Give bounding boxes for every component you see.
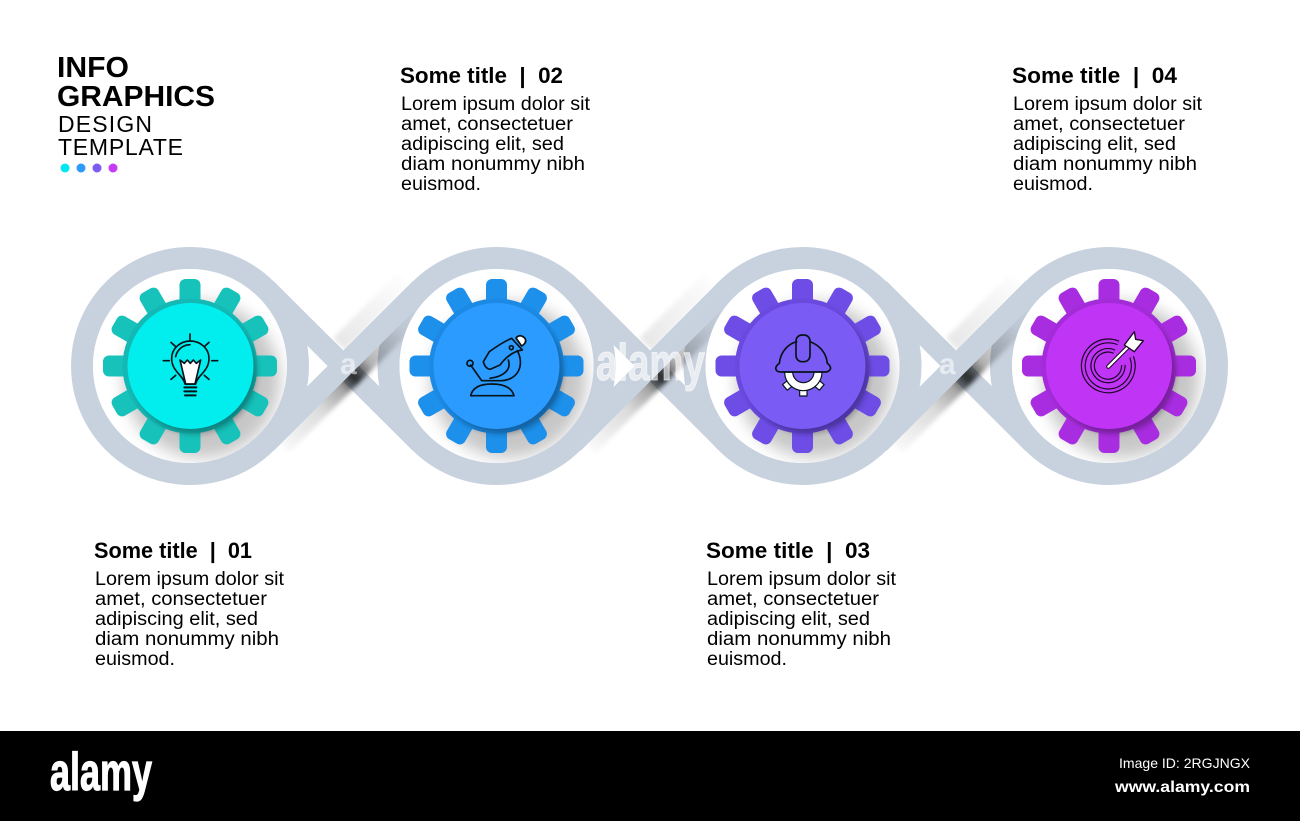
text block: step 01: diam nonummy nibh: [95, 629, 279, 650]
text block: step 04: Some title | 04: [1012, 63, 1178, 88]
heading: infographics design template: TEMPLATE: [58, 134, 183, 160]
icon: target with arrow: [1083, 332, 1143, 391]
footer logo: alamy: [50, 743, 152, 802]
text block: step 02: adipiscing elit, sed: [401, 134, 564, 155]
text block: step 03: amet, consectetuer: [707, 589, 880, 610]
step 3: violet gear: [706, 269, 900, 463]
text block: step 01: adipiscing elit, sed: [95, 609, 258, 630]
ribbon: interlaced rings and crossing strands: [82, 258, 1217, 474]
watermark on ribbon: [340, 334, 956, 392]
text block: step 01: amet, consectetuer: [95, 589, 268, 610]
heading: infographics design template: DESIGN: [58, 111, 152, 137]
icon: microscope: [467, 336, 526, 396]
text block: step 04: euismod.: [1013, 174, 1093, 195]
footer url: www.alamy.com: [1114, 779, 1250, 796]
watermark on ribbon: a: [340, 348, 357, 381]
watermark on ribbon: alamy: [596, 334, 705, 392]
text block: step 04: Lorem ipsum dolor sit: [1013, 94, 1203, 115]
step 1: cyan gear: [93, 269, 287, 463]
text block: step 01: Some title | 01: [94, 538, 252, 563]
text block: step 02: amet, consectetuer: [401, 114, 574, 135]
watermark on ribbon: a: [939, 348, 956, 381]
text block: step 03: [706, 538, 897, 670]
text block: step 01: euismod.: [95, 649, 175, 670]
text block: step 04: amet, consectetuer: [1013, 114, 1186, 135]
text block: step 02: Some title | 02: [400, 63, 563, 88]
step 2: blue gear: [400, 269, 594, 463]
text block: step 03: adipiscing elit, sed: [707, 609, 870, 630]
text block: step 01: Lorem ipsum dolor sit: [95, 569, 285, 590]
text block: step 02: diam nonummy nibh: [401, 154, 585, 175]
step 4: magenta gear: [1012, 269, 1206, 463]
text block: step 03: Some title | 03: [706, 538, 870, 563]
footer image id: Image ID: 2RGJNGX: [1119, 755, 1251, 771]
text block: step 02: Lorem ipsum dolor sit: [401, 94, 591, 115]
heading: infographics design template: [57, 52, 215, 172]
text block: step 04: adipiscing elit, sed: [1013, 134, 1176, 155]
text block: step 03: Lorem ipsum dolor sit: [707, 569, 897, 590]
text block: step 03: diam nonummy nibh: [707, 629, 891, 650]
text block: step 03: euismod.: [707, 649, 787, 670]
heading: infographics design template: GRAPHICS: [57, 81, 215, 113]
text block: step 02: [400, 63, 591, 195]
icon: light bulb: [163, 334, 218, 395]
text block: step 02: euismod.: [401, 174, 481, 195]
text block: step 04: diam nonummy nibh: [1013, 154, 1197, 175]
text block: step 01: [94, 538, 285, 670]
heading: infographics design template: INFO: [57, 52, 129, 84]
footer bar: [0, 731, 1300, 821]
icon: safety helmet with gear: [776, 335, 831, 396]
text block: step 04: [1012, 63, 1203, 195]
